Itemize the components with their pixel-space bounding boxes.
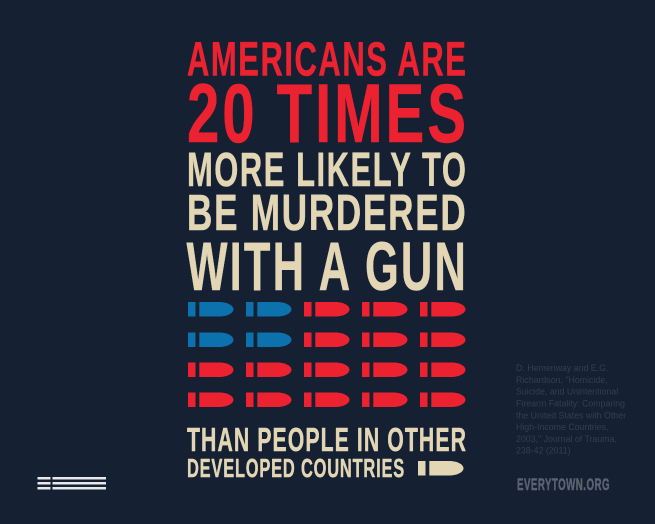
heading: 20 times: 20 TIMES (187, 66, 469, 160)
row 2 bullets (188, 332, 466, 347)
heading: with a gun: WITH A GUN (186, 228, 468, 305)
source citation: 2003," Journal of Trauma, (516, 434, 617, 444)
heading: more likely to: MORE LIKELY TO (187, 143, 468, 197)
source citation: Richardson, "Homicide, (516, 375, 608, 385)
icon: cream bullet legend (418, 461, 464, 476)
subheading: than people in other: THAN PEOPLE IN OTHER (187, 422, 467, 459)
heading: americans are: AMERICANS ARE (187, 32, 468, 86)
logo icon: stripes (38, 477, 106, 490)
source citation: Firearm Fatality: Comparing (516, 398, 625, 408)
row 4 bullets (188, 392, 466, 407)
bullet chart: 2 blue bullets and 18 red bullets (188, 302, 466, 407)
source citation: Suicide, and Unintentional (516, 386, 618, 396)
source citation: D. Hemenway and E.G. (516, 363, 608, 373)
row 3 bullets (188, 362, 466, 377)
source citation: High-Income Countries, (516, 422, 608, 432)
row 1 bullets (188, 302, 466, 316)
source citation: 238-42 (2011) (516, 446, 571, 456)
headline (186, 32, 469, 305)
subheading: developed countries: DEVELOPED COUNTRIES (187, 453, 405, 483)
source citation: the United States with Other (516, 410, 626, 420)
heading: be murdered: BE MURDERED (187, 184, 468, 241)
